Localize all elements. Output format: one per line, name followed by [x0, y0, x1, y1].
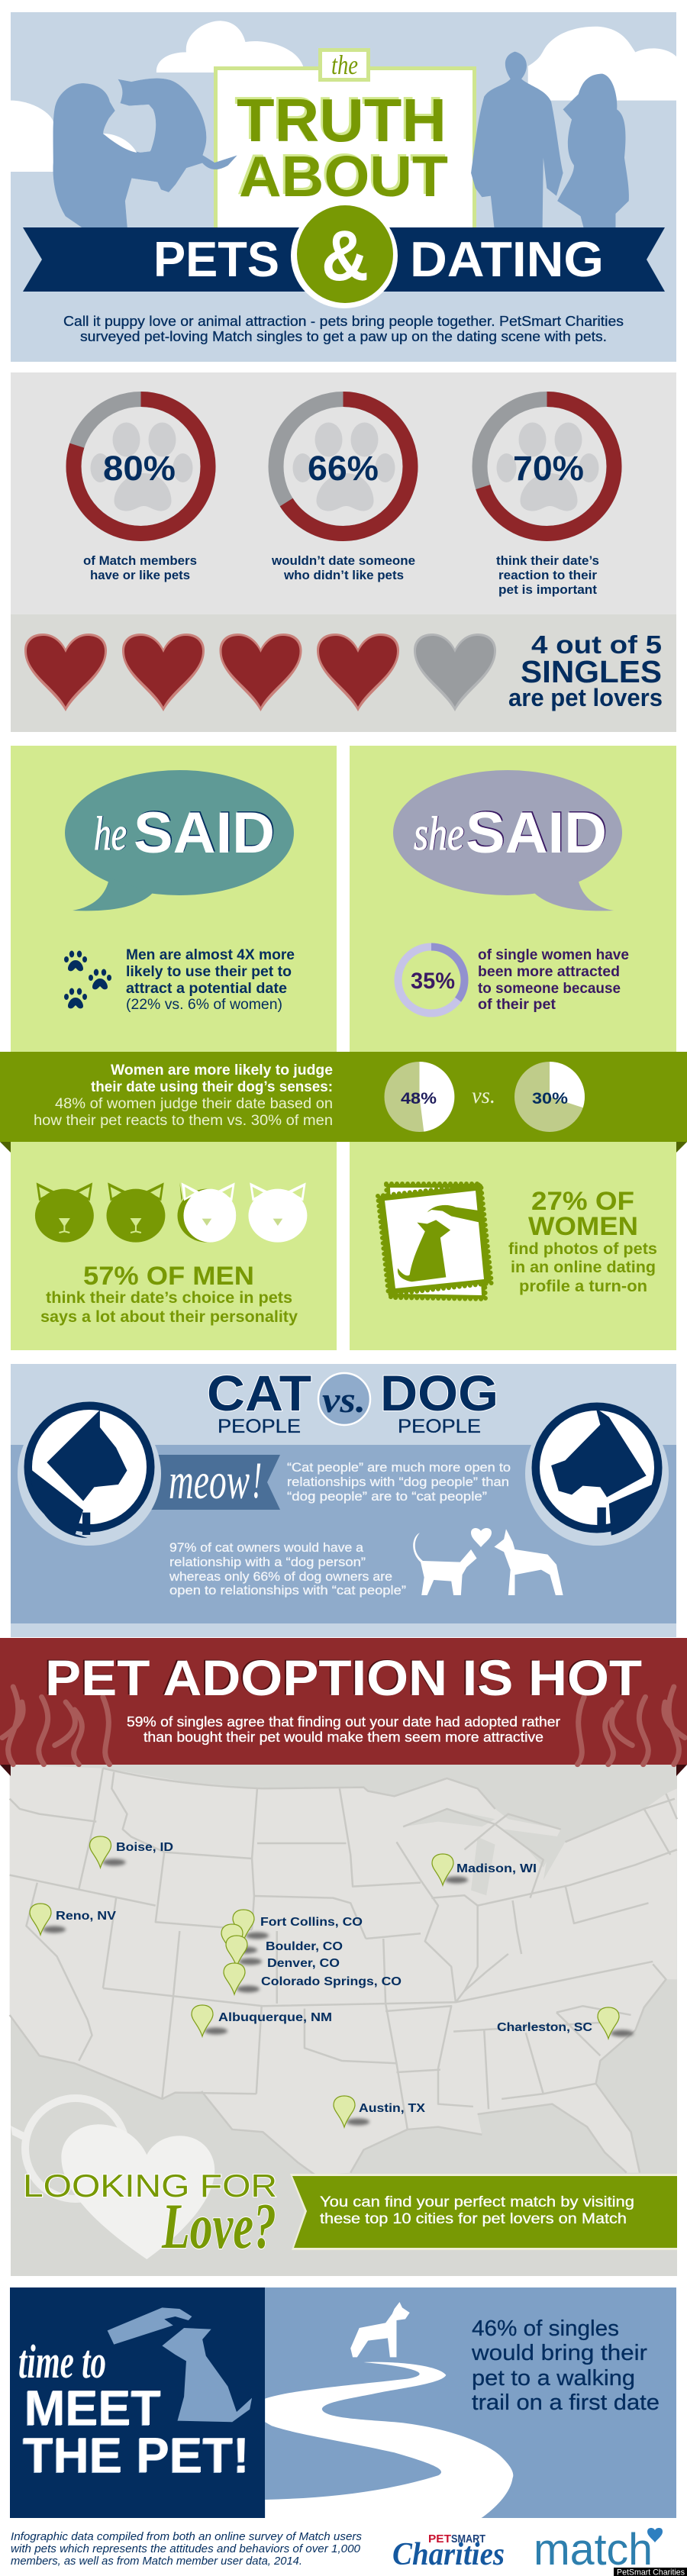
- text: 97% of cat owners: relationship with a “dog person”: [169, 1555, 366, 1569]
- speech bubble: he said: he: [95, 808, 127, 860]
- panel: men choice in pets: [11, 1142, 337, 1350]
- silhouette: woman holding cat: [53, 79, 237, 227]
- label: Albuquerque: Albuquerque, NM: [218, 2011, 332, 2024]
- caption: 70%: reaction to their: [498, 568, 597, 582]
- footer: source note: members, as well as from Match member user data, 2014.: [11, 2555, 302, 2568]
- clouds: [11, 21, 677, 172]
- caption: 66%: who didn’t like pets: [283, 568, 404, 582]
- text: 46% of singles: would bring their: [471, 2341, 647, 2365]
- panel: map of top cities: [10, 1765, 677, 2276]
- ribbon: top 10 cities: these top 10 cities for pet lovers on Match: [320, 2211, 627, 2227]
- footer: source note: with pets which represents the attitudes and behaviors of over 1,000: [11, 2542, 361, 2555]
- caption: 66%: wouldn’t date someone: [271, 553, 415, 568]
- heading: pets and dating: PETS: [153, 231, 279, 287]
- text: 46% of singles: trail on a first date: [472, 2391, 660, 2415]
- text: women judge: [34, 1062, 333, 1129]
- text: 4 out of 5: [508, 630, 663, 711]
- badge: vs: [318, 1373, 370, 1425]
- text: 97% of cat owners: whereas only 66% of dog owners are: [169, 1569, 392, 1584]
- pie chart: 48%: [385, 1062, 455, 1132]
- ring chart: 80%: [73, 399, 208, 534]
- speech bubble: he said: he: [94, 808, 127, 860]
- panel: green band judging dates: [0, 1052, 687, 1153]
- title box: [215, 50, 475, 232]
- ring chart: 80%: 80%: [103, 449, 176, 488]
- text: 57% of men: think their date’s choice in pets: [46, 1289, 292, 1307]
- ring chart: 66%: 66%: [308, 449, 379, 488]
- speech bubble: she said: [393, 770, 622, 911]
- label: Boulder: Boulder, CO: [266, 1940, 343, 1953]
- text: 4 out of 5: SINGLES: [521, 654, 662, 689]
- text: women judge: how their pet reacts to them vs. 30% of men: [34, 1113, 333, 1129]
- label: Boise: Boise, ID: [116, 1841, 173, 1854]
- text: 97% of cat owners: [169, 1540, 406, 1598]
- speech bubble: she said: she: [414, 808, 465, 860]
- text: men 4x: likely to use their pet to: [126, 964, 292, 980]
- icon: dog badge: [525, 1402, 669, 1546]
- ribbon banner: [23, 227, 665, 292]
- intro text: [63, 314, 624, 344]
- caption: 70%: [496, 553, 599, 597]
- icon: cat badge: [18, 1401, 161, 1546]
- footer: source note: Infographic data compiled from both an online survey of Match users: [11, 2530, 362, 2543]
- label: Colorado Springs: Colorado Springs, CO: [261, 1975, 402, 1988]
- badge: vs: vs.: [322, 1380, 366, 1420]
- text: cat people open: “dog people” are to “cat people”: [287, 1489, 487, 1504]
- flames: [2, 1687, 685, 1765]
- silhouette: couple: [471, 52, 629, 227]
- label: Austin: Austin, TX: [359, 2102, 425, 2115]
- text: cat people open: “Cat people” are much more open to: [287, 1460, 511, 1475]
- heading: time to meet the pet: MEET: [24, 2381, 160, 2436]
- text: 59% of singles: than bought their pet would make them seem more attractive: [144, 1730, 543, 1745]
- label: Denver: Denver, CO: [267, 1957, 340, 1970]
- panel: cat vs dog: [11, 1364, 676, 1637]
- heading: time to meet the pet: MEET: [24, 2380, 161, 2436]
- pin: Reno: [30, 1904, 66, 1935]
- heading: cat vs dog: PEOPLE: [218, 1416, 301, 1437]
- text: 27% of women: in an online dating: [511, 1259, 656, 1276]
- pie chart: 30%: 30%: [532, 1090, 568, 1107]
- heading: looking for love: Love?: [161, 2191, 276, 2262]
- hearts: 4 of 5: [24, 634, 496, 711]
- text: single women: of their pet: [478, 997, 556, 1013]
- panel: he said: [11, 746, 337, 1052]
- ring chart: 66%: [276, 399, 411, 534]
- speech bubble: he said: [65, 770, 294, 911]
- pin: Boulder: [221, 1924, 257, 1955]
- panel: women photos: [350, 1142, 676, 1350]
- heading: time to meet the pet: [18, 2336, 250, 2484]
- text: 27% of women: find photos of pets: [508, 1240, 657, 1258]
- panel: statistics rings: [11, 372, 676, 614]
- ampersand badge: &: [321, 215, 369, 295]
- text: women judge: 48% of women judge their date based on: [55, 1096, 333, 1112]
- text: 57% of men: 57% OF MEN: [83, 1262, 254, 1291]
- heading: truth about: TRUTH: [234, 84, 444, 152]
- text: 27% of women: WOMEN: [528, 1212, 638, 1241]
- icon: paw prints: [64, 951, 111, 1008]
- speech bubble: she said: SAID: [467, 800, 608, 864]
- text: 97% of cat owners: open to relationships with “cat people”: [169, 1583, 406, 1598]
- speech bubble: he said: SAID: [134, 801, 275, 866]
- heading: pet adoption is hot: PET ADOPTION IS HOT: [45, 1649, 642, 1706]
- the tag: the: [331, 50, 358, 80]
- pie chart: 48%: 48%: [401, 1090, 437, 1107]
- text: 27% of women: profile a turn-on: [519, 1278, 647, 1295]
- pie chart: 30%: [514, 1062, 585, 1132]
- heading: time to meet the pet: THE PET!: [22, 2428, 249, 2484]
- heading: time to meet the pet: time to: [18, 2336, 106, 2388]
- heading: truth about: TRUTH: [237, 86, 447, 154]
- speech bubble: she said: SAID: [466, 801, 607, 866]
- label: Madison: Madison, WI: [456, 1862, 537, 1875]
- logo: match: match: [534, 2525, 653, 2574]
- footer: source note: [11, 2530, 362, 2568]
- text: 4 out of 5: 4 out of 5: [531, 630, 662, 659]
- heading: cat vs dog: [207, 1365, 498, 1437]
- pin: Fort Collins: [233, 1910, 269, 1941]
- ring chart: 70%: [479, 399, 614, 534]
- ribbon banner: DATING: [410, 231, 604, 287]
- caption: 80%: [83, 553, 197, 582]
- text: 59% of singles: 59% of singles agree that finding out your date had adopted rather: [127, 1714, 560, 1730]
- magnifying glass and heart: [11, 2098, 214, 2259]
- label: Fort Collins: Fort Collins, CO: [260, 1916, 363, 1929]
- caption: 80%: have or like pets: [90, 568, 190, 582]
- icon: hand petting dog: [108, 2307, 252, 2422]
- heading: cat vs dog: PEOPLE: [398, 1416, 481, 1437]
- text: 57% of men: [40, 1262, 298, 1326]
- text: women judge: their date using their dog’s senses:: [91, 1079, 333, 1095]
- label: Charleston: Charleston, SC: [497, 2021, 592, 2034]
- text: 46% of singles: 46% of singles: [472, 2316, 619, 2341]
- caption: 80%: of Match members: [83, 553, 197, 568]
- pin: Austin: [334, 2096, 369, 2127]
- map: united states: [10, 1765, 677, 2175]
- label: vs: vs.: [472, 1083, 495, 1108]
- text: women judge: Women are more likely to judge: [111, 1062, 333, 1078]
- panel: meet the pet: [10, 2287, 676, 2518]
- icon: paw: [496, 423, 598, 511]
- icon: pet photo stamps: [378, 1184, 492, 1299]
- winding trail: [265, 2362, 513, 2518]
- speech bubble: she said: she: [414, 808, 464, 860]
- icon: dog on trail: [350, 2302, 410, 2357]
- panel: hearts strip: [11, 614, 676, 732]
- icon: cat and dog with heart: [413, 1528, 563, 1595]
- the tag: [321, 50, 368, 80]
- text: 57% of men: says a lot about their personality: [40, 1308, 298, 1326]
- text: 46% of singles: [471, 2316, 660, 2415]
- text: 97% of cat owners: 97% of cat owners would have a: [169, 1540, 364, 1555]
- ring chart: 35%: [398, 946, 464, 1014]
- text: single women: of single women have: [478, 947, 629, 963]
- panel: she said: [350, 746, 676, 1052]
- pin: Denver: [226, 1936, 262, 1967]
- speech bubble: he said: SAID: [134, 800, 276, 864]
- heading: cat vs dog: DOG: [380, 1365, 498, 1421]
- ribbon: meow: !: [252, 1451, 262, 1509]
- text: men 4x: [126, 947, 295, 1013]
- icon: paw: [90, 423, 192, 511]
- heading: looking for love: LOOKING FOR: [23, 2168, 277, 2204]
- ribbon: top 10 cities: [290, 2174, 677, 2250]
- logo: PetSmart Charities: Charities: [392, 2537, 505, 2572]
- icon: paw: [293, 423, 395, 511]
- text: men 4x: attract a potential date: [126, 981, 287, 997]
- icon: cats 57%: [35, 1182, 307, 1243]
- pin: Colorado Springs: [224, 1963, 260, 1994]
- text: cat people open: [287, 1460, 511, 1504]
- text: single women: to someone because: [478, 981, 621, 997]
- text: single women: been more attracted: [478, 964, 620, 980]
- pin: Albuquerque: [192, 2005, 227, 2036]
- intro text: surveyed pet-loving Match singles to get a paw up on the dating scene with pets.: [80, 329, 607, 344]
- ribbon: meow: meow: [169, 1452, 250, 1510]
- caption: 70%: think their date’s: [496, 553, 599, 568]
- logo: PetSmart Charities: PET: [428, 2532, 451, 2545]
- heading: truth about: ABOUT: [239, 144, 448, 208]
- intro text: Call it puppy love or animal attraction - pets bring people together. PetSmart Charities: [63, 314, 624, 329]
- text: 27% of women: [508, 1187, 657, 1295]
- ring chart: 35%: 35%: [411, 969, 455, 994]
- text: men 4x: (22% vs. 6% of women): [126, 997, 282, 1013]
- heading: cat vs dog: CAT: [207, 1365, 311, 1421]
- ribbon: top 10 cities: You can find your perfect match by visiting: [320, 2194, 634, 2210]
- panel: pet adoption banner: [0, 1638, 687, 1776]
- caption: 66%: [271, 553, 415, 582]
- pin: Madison: [432, 1854, 468, 1885]
- text: single women: [478, 947, 629, 1013]
- text: 4 out of 5: are pet lovers: [508, 684, 663, 711]
- label: Reno: Reno, NV: [56, 1910, 116, 1923]
- pin: Charleston: [598, 2007, 634, 2039]
- heading: looking for love: [23, 2168, 277, 2262]
- pin: Boise: [90, 1836, 125, 1868]
- heading: time to meet the pet: THE PET!: [23, 2427, 250, 2483]
- heading: pet adoption is hot: PET ADOPTION IS HOT: [44, 1649, 640, 1705]
- logo: PetSmart Charities: SMART: [451, 2532, 485, 2545]
- text: men 4x: Men are almost 4X more: [126, 947, 295, 963]
- ring chart: 70%: 70%: [513, 449, 584, 488]
- text: cat people open: relationships with “dog people” than: [287, 1475, 509, 1489]
- text: 27% of women: 27% OF: [531, 1187, 634, 1216]
- caption: 70%: pet is important: [498, 582, 597, 597]
- ampersand badge: [291, 203, 398, 308]
- heading: truth about: ABOUT: [237, 142, 446, 206]
- heading: truth about: [234, 84, 448, 208]
- panel: header: [11, 12, 677, 362]
- text: 46% of singles: pet to a walking: [472, 2366, 635, 2391]
- text: 59% of singles: [127, 1714, 560, 1745]
